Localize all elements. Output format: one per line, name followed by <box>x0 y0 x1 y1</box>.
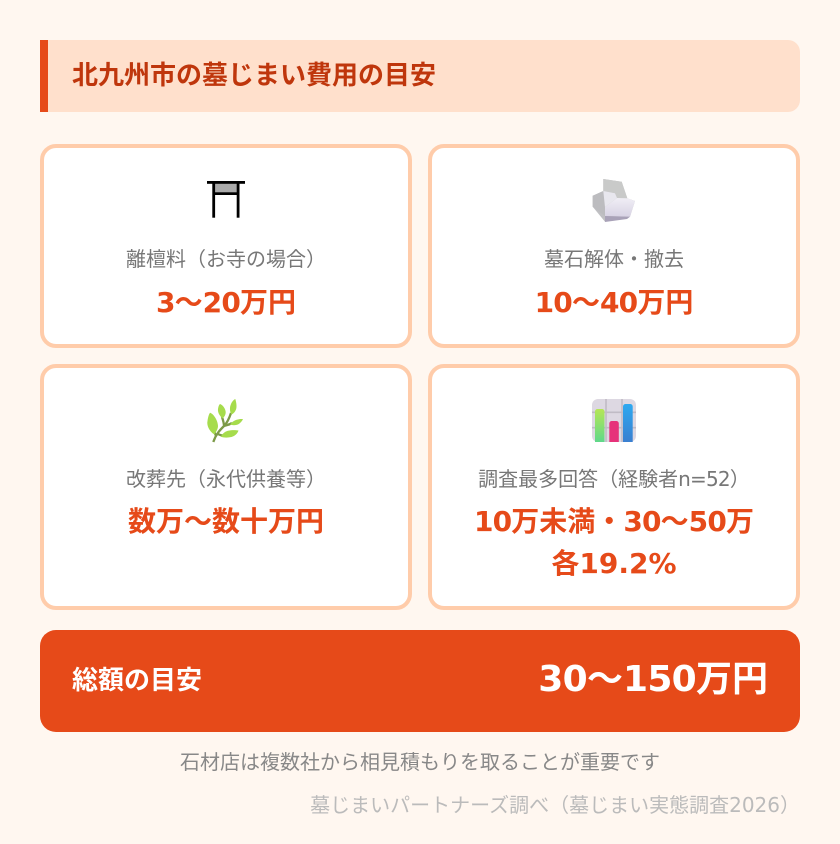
icon: torii <box>207 181 245 218</box>
value: 10〜40万円 <box>535 286 693 319</box>
note: 石材店は複数社から相見積もりを取ることが重要です <box>180 750 660 774</box>
panel: reburial <box>40 364 412 610</box>
value: 数万〜数十万円 <box>128 505 324 538</box>
icon: leaves <box>207 399 243 442</box>
panel: temple fee <box>40 144 412 348</box>
total value: 30〜150万円 <box>538 659 768 700</box>
label: 改葬先（永代供養等） <box>126 467 326 491</box>
icon: bar chart <box>592 399 636 442</box>
label: 調査最多回答（経験者n=52） <box>478 467 750 491</box>
header banner <box>40 40 800 112</box>
panel: gravestone removal <box>428 144 800 348</box>
label: 離檀料（お寺の場合） <box>126 247 326 271</box>
panel: survey <box>428 364 800 610</box>
source: 墓じまいパートナーズ調べ（墓じまい実態調査2026） <box>310 793 800 817</box>
label: 墓石解体・撤去 <box>544 247 684 271</box>
total label: 総額の目安 <box>72 666 202 696</box>
icon: rock <box>592 179 635 222</box>
value: 各19.2% <box>551 547 677 580</box>
value <box>474 505 754 580</box>
value: 3〜20万円 <box>156 286 296 319</box>
title: 北九州市の墓じまい費用の目安 <box>72 61 436 91</box>
value: 10万未満・30〜50万 <box>474 505 754 538</box>
total bar <box>40 630 800 732</box>
